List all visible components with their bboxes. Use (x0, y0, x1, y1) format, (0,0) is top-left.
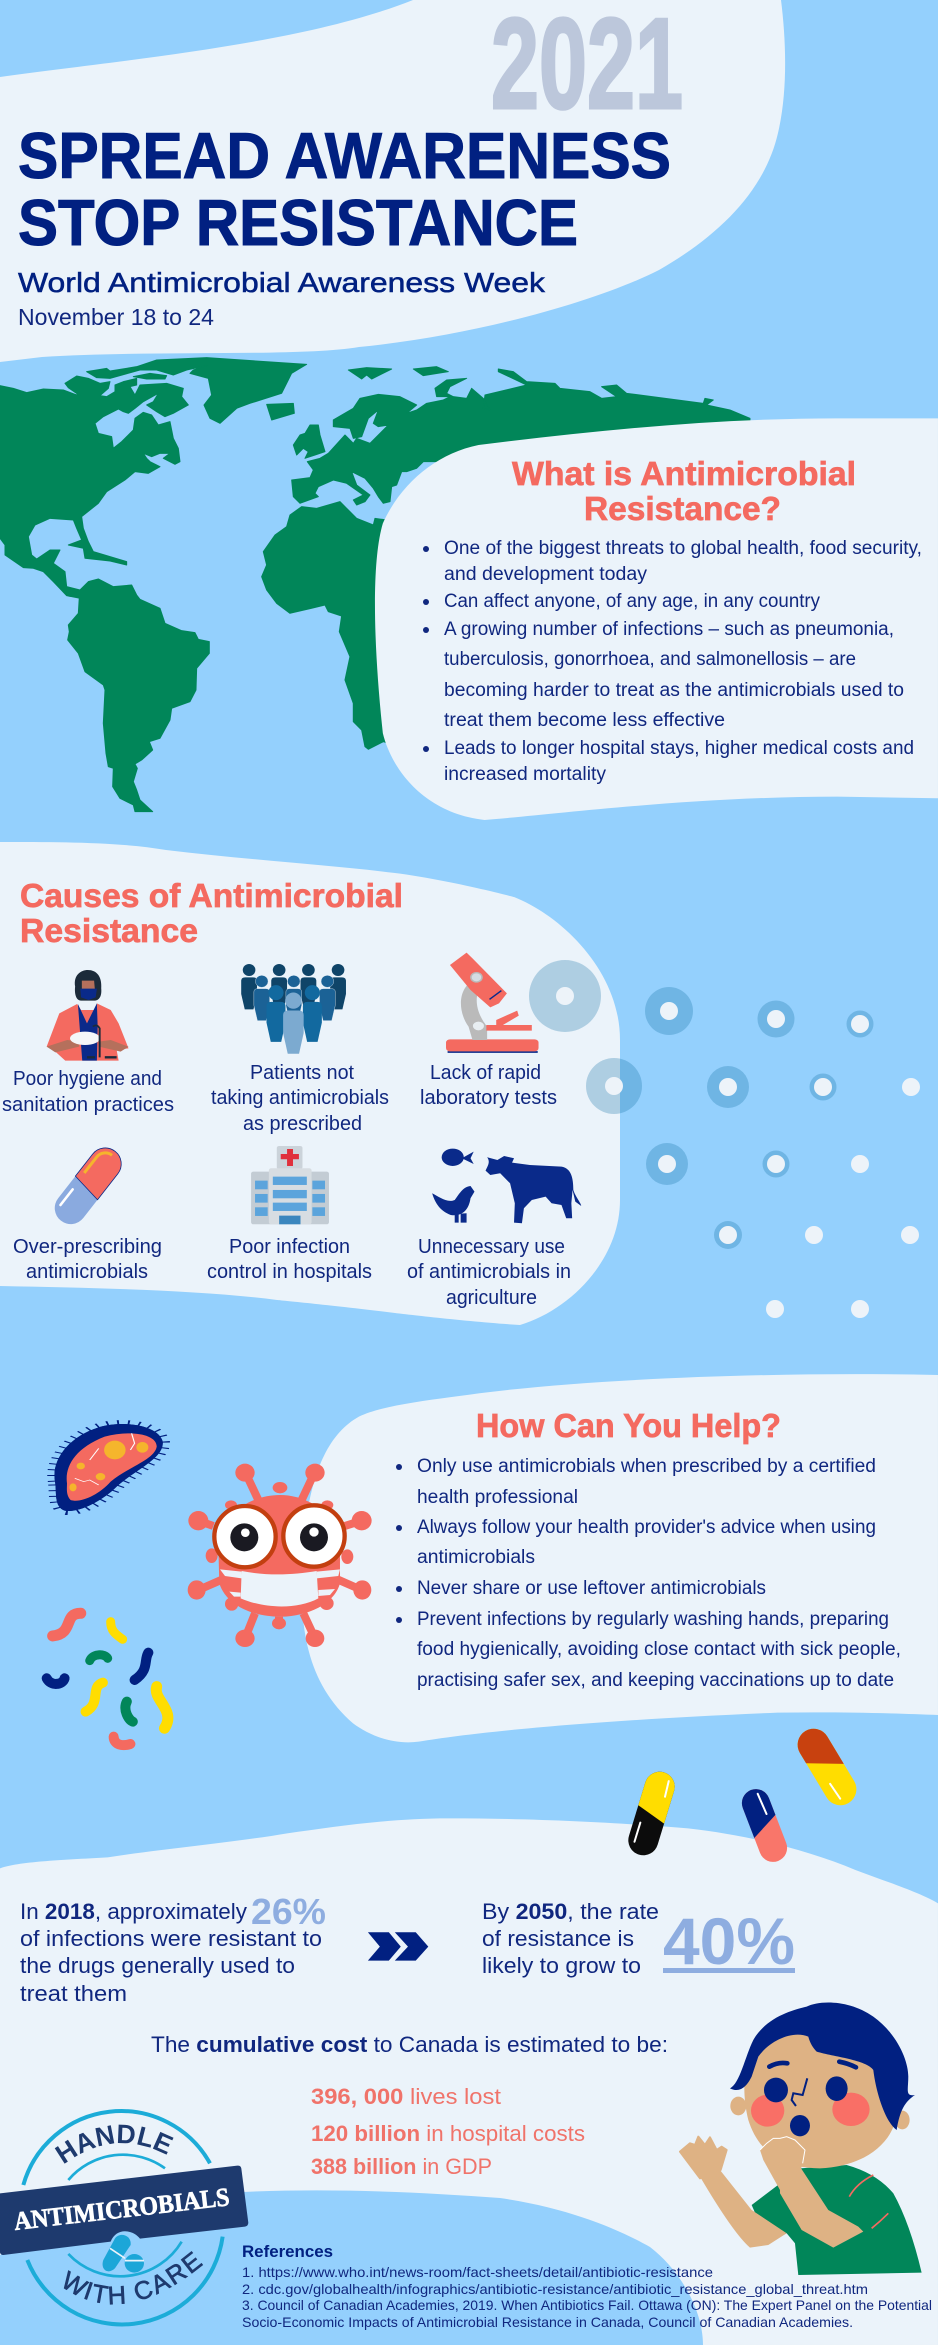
icon: group of patients (241, 964, 346, 1054)
cause labels: laboratory tests (420, 1087, 557, 1109)
reference list (242, 2264, 932, 2330)
bullet list: Only use antimicrobials when prescribed by a certified (417, 1456, 876, 1477)
stat: 2018 (20, 1891, 326, 2006)
panel: statistics and cost (0, 1818, 938, 2345)
blue blob behind references (0, 2190, 703, 2345)
world map (0, 358, 750, 812)
cause labels: Lack of rapid (430, 1062, 541, 1084)
bullet list: becoming harder to treat as the antimicrobials used to (444, 680, 904, 701)
cause labels: sanitation practices (2, 1094, 174, 1116)
date: November 18 to 24 (18, 304, 214, 330)
bullet list: Prevent infections by regularly washing hands, preparing (417, 1609, 889, 1630)
reference list: Socio-Economic Impacts of Antimicrobial Resistance in Canada, Council of Canadian Academies. (242, 2314, 853, 2330)
badge: handle antimicrobials with care (0, 2109, 248, 2326)
bullet list: practising safer sex, and keeping vaccinations up to date (417, 1670, 894, 1691)
eurasia and islands (267, 367, 750, 505)
heading (512, 455, 856, 527)
icon: masked virus (188, 1464, 372, 1647)
cause labels: Poor hygiene and (13, 1068, 162, 1090)
bullet list: One of the biggest threats to global health, food security, (444, 538, 922, 559)
title (18, 119, 671, 259)
south america (68, 579, 209, 812)
heading: Resistance? (584, 490, 781, 527)
stat: 2050: 40% (663, 1904, 795, 1978)
cause labels: Over-prescribing (13, 1236, 162, 1258)
bullet list: Never share or use leftover antimicrobials (417, 1578, 766, 1599)
stat: 2018: treat them (20, 1981, 127, 2006)
bullet list: and development today (444, 564, 647, 585)
heading: Causes of Antimicrobial (20, 877, 403, 914)
africa (262, 502, 417, 752)
icon: worried boy (680, 2002, 922, 2275)
bullet list: Can affect anyone, of any age, in any country (444, 591, 820, 612)
cost figures: 396, 000 lives lost (311, 2084, 501, 2109)
subtitle: World Antimicrobial Awareness Week (18, 267, 546, 298)
bullet list: food hygienically, avoiding close contact with sick people, (417, 1639, 901, 1660)
stat: 2050: of resistance is (482, 1926, 634, 1951)
reference list: 3. Council of Canadian Academies, 2019. When Antibiotics Fail. Ottawa (ON): The Expert Panel on the Potential (242, 2297, 932, 2313)
icon: bacteria squiggles (47, 1613, 168, 1745)
cause labels: Patients not (250, 1062, 354, 1084)
stat: 2018: 26% (251, 1891, 326, 1932)
dot pattern (529, 960, 920, 1318)
cumulative cost: The cumulative cost to Canada is estimated to be: (151, 2032, 668, 2057)
bullet list: antimicrobials (417, 1547, 535, 1568)
north america and greenland (0, 358, 307, 598)
cost figures: 120 billion in hospital costs (311, 2121, 585, 2146)
cause labels: antimicrobials (26, 1261, 148, 1283)
heading: Resistance (20, 912, 198, 949)
bullet list: tuberculosis, gonorrhoea, and salmonellosis – are (444, 649, 856, 670)
icon: health worker washing hands (47, 970, 129, 1061)
stat: 2050: By 2050, the rate (482, 1899, 659, 1924)
bullet list: Leads to longer hospital stays, higher medical costs and (444, 738, 914, 759)
cause labels: Unnecessary use (418, 1236, 565, 1258)
stat: 2050 (482, 1899, 795, 1978)
badge: handle antimicrobials with care: ANTIMICROBIALS (12, 2182, 231, 2236)
stat: 2018: the drugs generally used to (20, 1953, 295, 1978)
cause labels: taking antimicrobials (211, 1087, 389, 1109)
badge: handle antimicrobials with care: WITH CARE (64, 2251, 204, 2305)
title: STOP RESISTANCE (18, 186, 578, 259)
bullet list: health professional (417, 1487, 578, 1508)
stat: 2018: of infections were resistant to (20, 1926, 322, 1951)
bullet list (423, 538, 922, 785)
panel: causes of antimicrobial resistance (0, 842, 620, 1325)
bullet list: A growing number of infections – such as pneumonia, (444, 619, 894, 640)
badge: handle antimicrobials with care: HANDLE (54, 2124, 174, 2164)
bullet list: increased mortality (444, 764, 607, 785)
panel: how can you help (302, 1374, 938, 1742)
heading: What is Antimicrobial (512, 455, 856, 492)
cost figures: 388 billion in GDP (311, 2154, 492, 2179)
panel: what is antimicrobial resistance (375, 418, 938, 820)
cause labels: as prescribed (243, 1113, 362, 1135)
cause labels: Poor infection (229, 1236, 350, 1258)
cause labels: agriculture (446, 1287, 537, 1309)
bullet list: treat them become less effective (444, 710, 725, 731)
stat: 2018: In 2018, approximately (20, 1899, 247, 1924)
references (242, 2242, 932, 2330)
cause labels (2, 1062, 571, 1309)
icon: capsules (625, 1723, 862, 1866)
cause labels: of antimicrobials in (407, 1261, 571, 1283)
cost figures (311, 2084, 585, 2179)
icon: hospital (251, 1146, 329, 1224)
bullet list: Always follow your health provider's advice when using (417, 1517, 876, 1538)
arrow: chevrons (368, 1932, 428, 1961)
stat: 2050: likely to grow to (482, 1953, 641, 1978)
icon: capsule (48, 1141, 128, 1231)
reference list: 1. https://www.who.int/news-room/fact-sheets/detail/antibiotic-resistance (242, 2264, 713, 2280)
panel: header (0, 0, 785, 362)
reference list: 2. cdc.gov/globalhealth/infographics/antibiotic-resistance/antibiotic_resistance_global_threat.htm (242, 2281, 868, 2297)
heading (20, 877, 403, 949)
icon: bacterium (54, 1424, 163, 1511)
bullet list (396, 1456, 901, 1691)
cause labels: control in hospitals (207, 1261, 372, 1283)
references heading: References (242, 2242, 333, 2261)
heading: How Can You Help? (476, 1407, 781, 1444)
icon: farm animals (432, 1149, 581, 1223)
title: SPREAD AWARENESS (18, 119, 671, 192)
icon: microscope (446, 953, 539, 1052)
